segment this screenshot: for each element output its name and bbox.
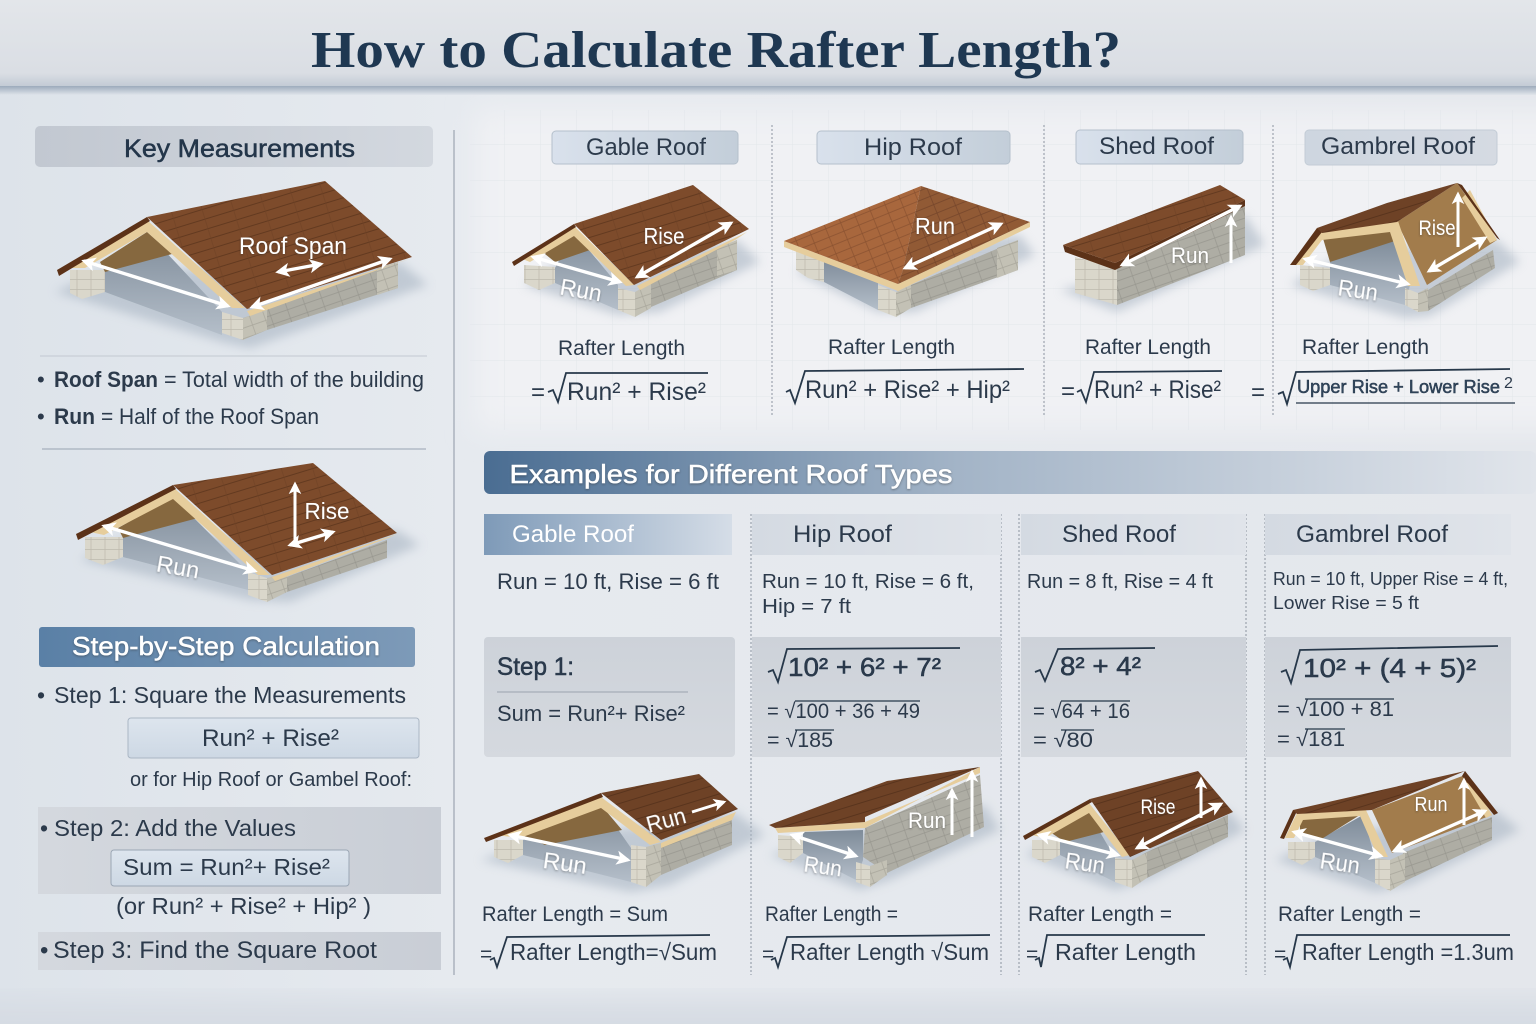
- rafter length: Rafter Length =: [1278, 903, 1421, 926]
- example card: gable roof: [480, 514, 765, 967]
- given values: Run = 10 ft, Upper Rise = 4 ft,: [1273, 569, 1508, 589]
- formula: =: [1251, 379, 1265, 406]
- step panel: = √64 + 16: [1033, 700, 1130, 723]
- definition: roof span: = Total width of the building: [164, 367, 424, 392]
- diagram: run and rise gable: [76, 463, 420, 602]
- step 2 formula box: Sum = Run²+ Rise²: [123, 854, 330, 880]
- heading: step-by-step: Step-by-Step Calculation: [72, 631, 380, 661]
- given values: [762, 570, 974, 618]
- diagram: run and rise gable: Rise: [304, 498, 350, 524]
- card heading: [1021, 514, 1246, 555]
- formula: =: [1061, 378, 1075, 405]
- result formula: [1274, 935, 1514, 967]
- step 2 panel: [38, 807, 441, 894]
- panel: key measurements: [35, 126, 433, 602]
- step panel: = √80: [1033, 729, 1093, 752]
- diagram: [1023, 771, 1245, 890]
- step 2 panel: Step 2: Add the Values: [54, 815, 296, 841]
- given values: [1273, 569, 1508, 613]
- diagram: Run: [1414, 794, 1448, 816]
- formula: =: [531, 379, 545, 406]
- definition: run: Run: [54, 404, 95, 429]
- result formula: [480, 935, 717, 967]
- diagram: Rise: [644, 223, 684, 249]
- formula: Run² + Rise²: [1094, 376, 1221, 404]
- step panel: [752, 637, 1001, 757]
- heading: Gambrel Roof: [1321, 133, 1475, 160]
- panel: hip roof: [784, 131, 1035, 404]
- banner: examples for different roof types: [484, 451, 1536, 494]
- diagram: Run: [1171, 243, 1209, 268]
- step 2 panel: •: [40, 815, 48, 841]
- diagram: [1275, 771, 1520, 892]
- card heading: Gable Roof: [512, 521, 634, 548]
- step panel: = √100 + 81: [1277, 698, 1394, 721]
- given values: Run = 10 ft, Rise = 6 ft: [497, 569, 719, 594]
- diagram: [769, 767, 1000, 890]
- step 3 panel: Step 3: Find the Square Root: [53, 937, 377, 964]
- step panel: 8² + 4²: [1060, 651, 1141, 681]
- heading: [1305, 130, 1497, 165]
- rafter length: Rafter Length =: [765, 903, 898, 926]
- card heading: Gambrel Roof: [1296, 521, 1448, 548]
- diagram: Run: [908, 808, 946, 833]
- step 3 panel: [38, 932, 441, 970]
- formula: [1251, 369, 1515, 406]
- rafter length label: Rafter Length: [558, 337, 685, 360]
- panel: step-by-step calculation: [37, 627, 441, 970]
- card heading: [752, 514, 1001, 555]
- given values: Run = 10 ft, Rise = 6 ft,: [762, 570, 974, 593]
- banner: examples for different roof types: Examples for Different Roof Types: [510, 459, 952, 489]
- formula: [1061, 371, 1222, 405]
- rafter length label: Rafter Length: [1085, 336, 1211, 359]
- note: hip or gambrel: or for Hip Roof or Gambel Roof:: [130, 769, 412, 791]
- heading: key measurements: [35, 126, 433, 167]
- step panel: 10² + (4 + 5)²: [1303, 653, 1476, 683]
- heading: [817, 131, 1010, 164]
- card heading: Shed Roof: [1062, 521, 1176, 548]
- diagram: [512, 185, 760, 317]
- card heading: Hip Roof: [793, 521, 892, 548]
- panel: shed roof: [1060, 130, 1265, 405]
- result formula: =: [1274, 943, 1286, 966]
- formula: [531, 373, 708, 406]
- step 1 heading: •: [37, 682, 45, 708]
- result formula: [762, 935, 990, 967]
- result formula: [1026, 935, 1205, 967]
- step panel: Sum = Run²+ Rise²: [497, 701, 685, 726]
- step panel: [1265, 637, 1511, 757]
- formula: 2: [1504, 375, 1513, 392]
- heading: [552, 131, 738, 164]
- diagram: Rise: [1140, 796, 1176, 819]
- formula: Run² + Rise²: [567, 378, 706, 406]
- step panel: = √100 + 36 + 49: [767, 700, 920, 723]
- diagram: Rise: [1418, 217, 1456, 240]
- result formula: =: [480, 943, 492, 966]
- heading: [1076, 130, 1243, 164]
- result formula: Rafter Length =1.3um: [1302, 939, 1514, 965]
- example card: shed roof: [1021, 514, 1246, 967]
- diagram: Run: [915, 213, 955, 239]
- diagram: [1060, 185, 1265, 312]
- example card: gambrel roof: [1265, 514, 1520, 967]
- diagram: Run: [1063, 847, 1107, 879]
- heading: Gable Roof: [586, 134, 706, 161]
- result formula: Rafter Length √Sum: [790, 939, 989, 965]
- step 2 alternative: (or Run² + Rise² + Hip² ): [116, 893, 371, 919]
- card heading: [1265, 514, 1511, 555]
- diagram: [1290, 183, 1520, 318]
- diagram: roof span gable: [55, 181, 428, 348]
- formula: Run² + Rise² + Hip²: [805, 376, 1010, 404]
- card heading: [484, 514, 732, 555]
- heading: key measurements: Key Measurements: [124, 135, 355, 163]
- diagram: [480, 774, 765, 892]
- step panel: 10² + 6² + 7²: [788, 652, 941, 682]
- step 3 panel: •: [40, 937, 48, 964]
- result formula: Rafter Length: [1055, 939, 1196, 965]
- step 1 formula box: Run² + Rise²: [202, 725, 339, 752]
- step panel: = √185: [767, 729, 833, 752]
- step 1 formula box: [128, 718, 419, 758]
- definition: run: = Half of the Roof Span: [101, 404, 319, 429]
- rafter length label: Rafter Length: [1302, 336, 1429, 359]
- diagram: Run: [558, 274, 604, 306]
- definition: roof span: •: [37, 367, 45, 392]
- formula: Upper Rise + Lower Rise: [1297, 377, 1500, 397]
- given values: Hip = 7 ft: [762, 595, 851, 618]
- diagram: [784, 186, 1035, 317]
- rafter length label: Rafter Length: [828, 336, 955, 359]
- given values: Lower Rise = 5 ft: [1273, 593, 1419, 613]
- result formula: =: [1026, 943, 1038, 966]
- given values: Run = 8 ft, Rise = 4 ft: [1027, 571, 1213, 593]
- title text: How to Calculate Rafter Length?: [311, 22, 1121, 79]
- step panel: Step 1:: [497, 653, 574, 681]
- definition: roof span: Roof Span: [54, 367, 158, 392]
- step panel: = √181: [1277, 728, 1345, 751]
- heading: step-by-step: [39, 627, 415, 667]
- diagram: Run: [643, 802, 689, 838]
- step panel: [484, 637, 735, 757]
- example card: hip roof: [752, 514, 1001, 967]
- step 2 formula box: [111, 850, 349, 886]
- diagram: Run: [1318, 847, 1362, 879]
- diagram: run and rise gable: Run: [155, 550, 201, 584]
- diagram: Run: [1336, 274, 1380, 306]
- panel: gambrel roof: [1251, 130, 1520, 406]
- diagram: Run: [541, 847, 589, 879]
- title banner: [0, 0, 1536, 95]
- rafter length: Rafter Length =: [1028, 903, 1172, 926]
- result formula: Rafter Length=√Sum: [510, 939, 717, 965]
- panel: gable roof: [512, 131, 760, 406]
- result formula: =: [762, 943, 774, 966]
- diagram: roof span gable: Roof Span: [239, 233, 347, 260]
- step panel: [1021, 637, 1246, 757]
- definition: run: •: [37, 404, 45, 429]
- step 1 heading: Step 1: Square the Measurements: [54, 682, 406, 708]
- rafter length: Rafter Length = Sum: [482, 903, 668, 926]
- diagram: Run: [802, 851, 843, 882]
- heading: Hip Roof: [864, 134, 962, 161]
- heading: Shed Roof: [1099, 133, 1214, 160]
